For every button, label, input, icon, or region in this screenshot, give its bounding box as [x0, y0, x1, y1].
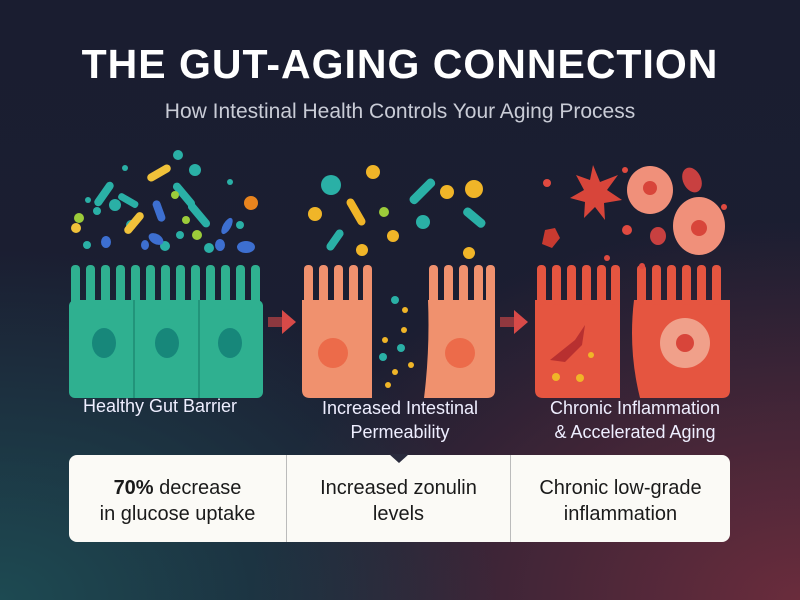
- label 3: [550, 398, 720, 442]
- label 2: Permeability: [350, 422, 450, 442]
- stat 3: inflammation: [564, 503, 677, 525]
- panel: permeable gut cells: [302, 265, 495, 398]
- label 3: Chronic Inflammation: [550, 398, 720, 418]
- stat 3: [539, 477, 702, 525]
- arrow 2: [500, 310, 528, 334]
- arrow 1: [268, 310, 296, 334]
- inflammatory cells: [542, 164, 727, 269]
- stat 1: 70% decrease: [114, 477, 241, 499]
- title: THE GUT-AGING CONNECTION: [82, 41, 718, 87]
- stat 3: Chronic low-grade: [539, 477, 702, 499]
- stat 2: [320, 477, 477, 525]
- label 3: & Accelerated Aging: [554, 422, 716, 442]
- stat 1: [100, 477, 255, 525]
- microbes: permeable: [308, 165, 487, 259]
- stat 1: in glucose uptake: [100, 503, 255, 525]
- stat 2: levels: [373, 503, 424, 525]
- stats box: [69, 455, 730, 542]
- panel: healthy gut cells: [69, 265, 263, 398]
- stat 2: Increased zonulin: [320, 477, 477, 499]
- label 2: Increased Intestinal: [322, 398, 478, 418]
- subtitle: How Intestinal Health Controls Your Aging Process: [165, 100, 635, 123]
- microbes: healthy: [71, 150, 258, 253]
- panel: inflamed cells: [535, 265, 730, 398]
- label 1: Healthy Gut Barrier: [83, 396, 237, 416]
- label 2: [322, 398, 478, 442]
